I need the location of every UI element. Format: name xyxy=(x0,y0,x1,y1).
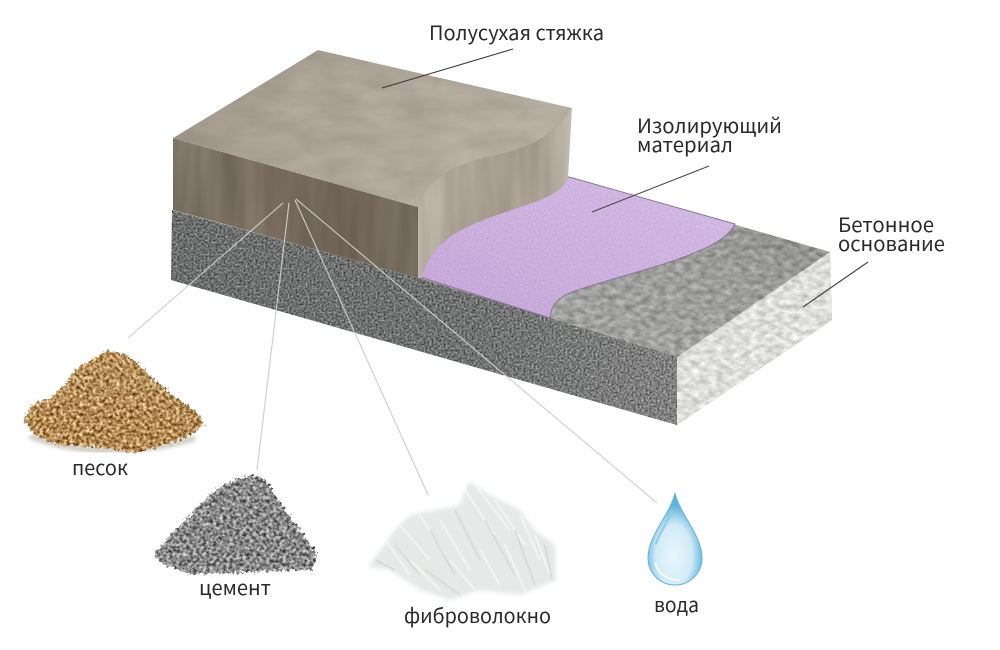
label: concrete base: основание xyxy=(838,228,945,257)
label: screed: Полусухая стяжка xyxy=(429,17,604,46)
label: insulating material: материал xyxy=(637,129,733,158)
icon: cement pile xyxy=(153,475,317,574)
icon: fibre bundle xyxy=(368,482,556,600)
leader lines to ingredients xyxy=(128,199,657,503)
layer: concrete base top surface xyxy=(418,178,830,357)
label: water: вода xyxy=(654,589,699,618)
icon: water drop xyxy=(648,493,702,585)
layer: screed front face xyxy=(173,138,418,278)
layer: concrete base side face xyxy=(677,252,832,425)
layer: screed top surface xyxy=(173,50,572,207)
leader line: insulation xyxy=(592,166,709,212)
icon: sand pile xyxy=(23,350,204,453)
leader line: screed xyxy=(382,49,513,88)
label: fibre: фиброволокно xyxy=(404,600,551,629)
layer: concrete base front face xyxy=(171,210,677,425)
layered block diagram xyxy=(171,50,832,425)
label: insulating material: Изолирующий xyxy=(637,110,782,139)
layer: screed curved side xyxy=(418,108,572,278)
label: concrete base: Бетонное xyxy=(838,209,934,238)
label: cement: цемент xyxy=(199,572,271,601)
layer: insulating material xyxy=(420,170,735,318)
label: sand: песок xyxy=(72,452,128,481)
leader line: concrete base xyxy=(803,262,868,307)
